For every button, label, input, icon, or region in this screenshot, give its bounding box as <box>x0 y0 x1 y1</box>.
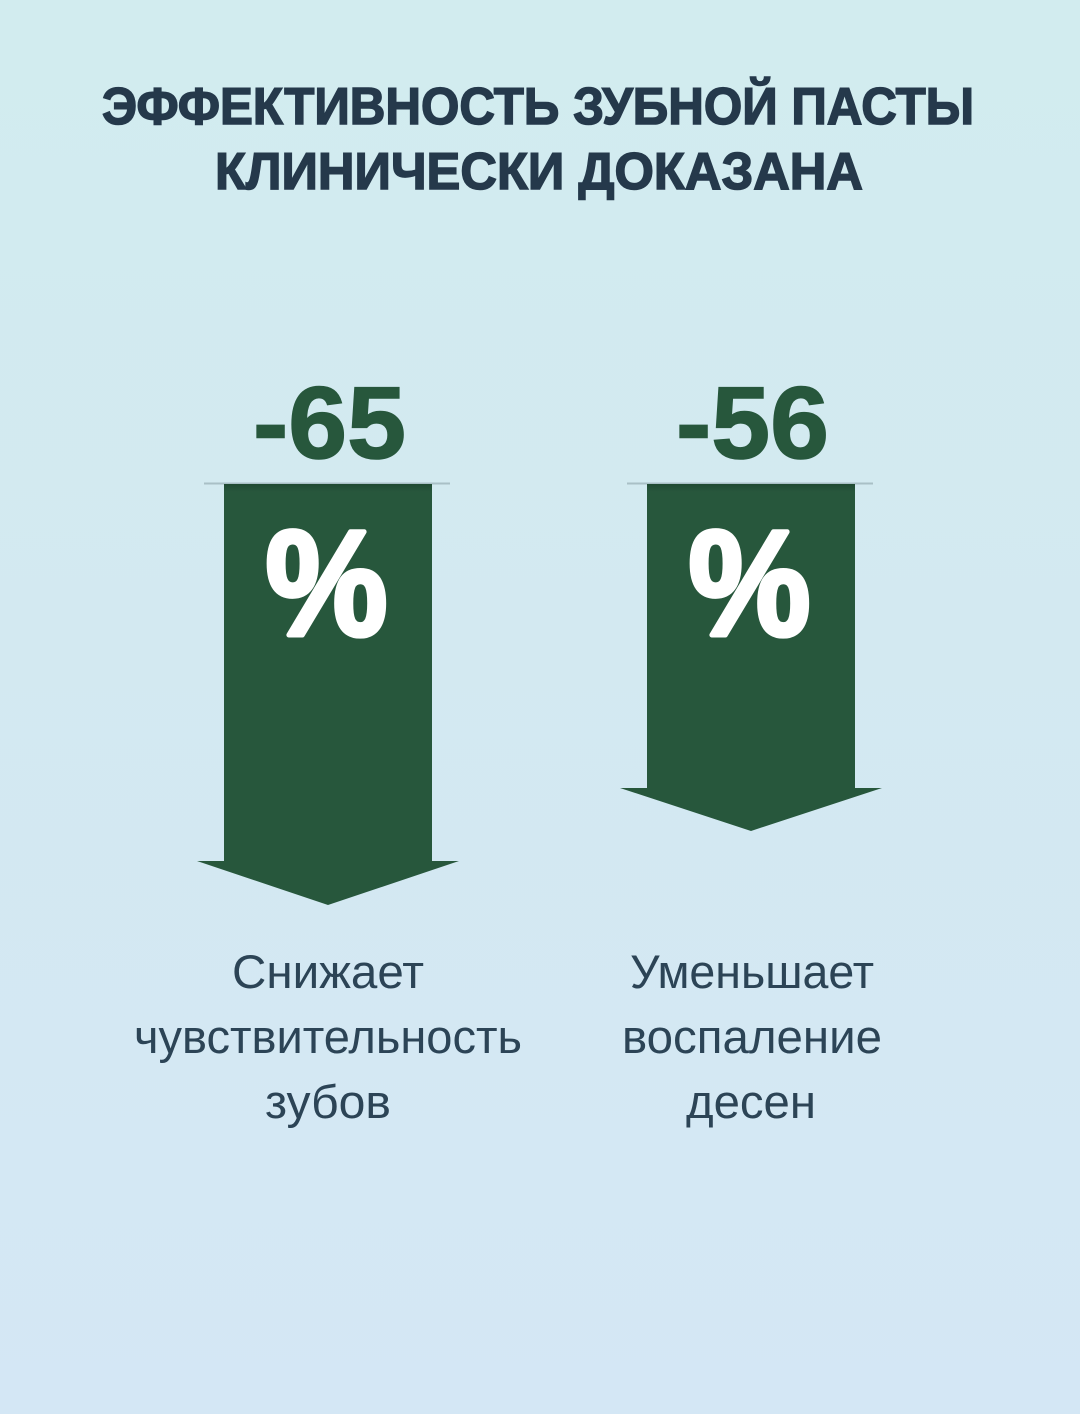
caption: inflammation: десен <box>686 1075 816 1128</box>
caption: sensitivity <box>134 945 522 1128</box>
arrow: long down arrow <box>197 482 459 905</box>
title: ЭФФЕКТИВНОСТЬ ЗУБНОЙ ПАСТЫ <box>102 77 974 136</box>
arrow: shorter down arrow <box>620 482 882 831</box>
percent sign: % <box>688 499 810 667</box>
caption: inflammation: воспаление <box>622 1010 882 1063</box>
title <box>102 77 974 201</box>
caption: sensitivity: Снижает <box>232 945 424 998</box>
caption: inflammation <box>622 945 882 1128</box>
value: -56: -56 <box>676 366 829 480</box>
caption: inflammation: Уменьшает <box>630 945 874 998</box>
title: КЛИНИЧЕСКИ ДОКАЗАНА <box>215 143 863 201</box>
caption: sensitivity: зубов <box>265 1075 391 1128</box>
panel: sensitivity -65% <box>134 366 522 1128</box>
caption: sensitivity: чувствительность <box>134 1010 522 1063</box>
value: -65: -65 <box>253 366 406 480</box>
panel: inflammation -56% <box>620 366 882 1128</box>
percent sign: % <box>266 499 388 667</box>
